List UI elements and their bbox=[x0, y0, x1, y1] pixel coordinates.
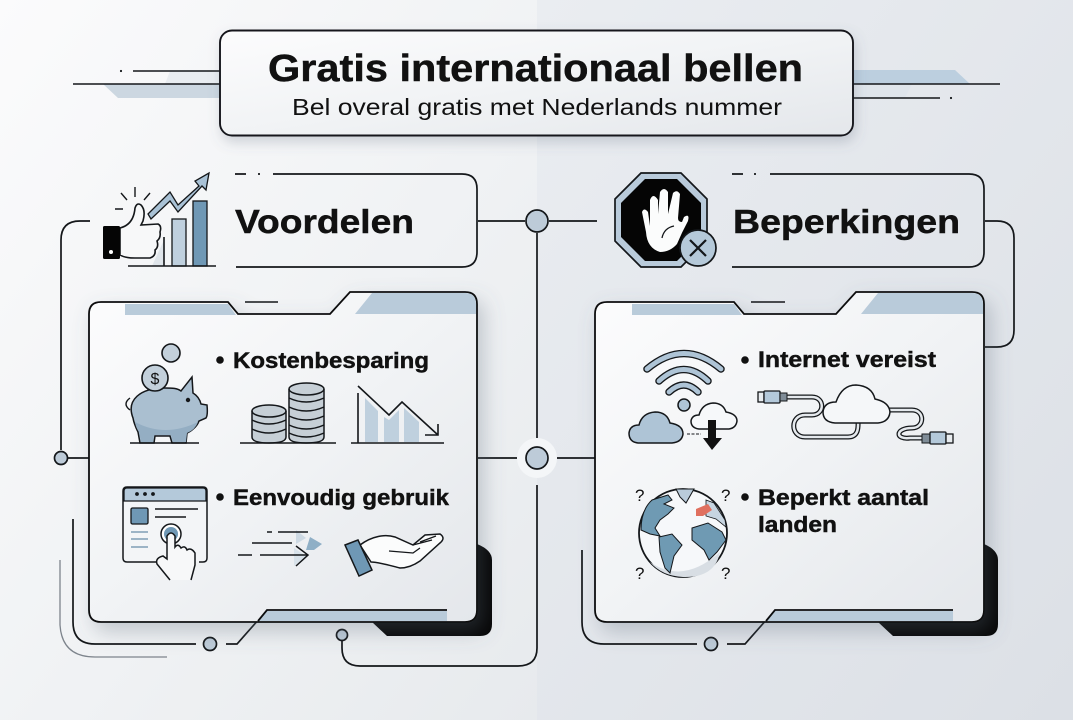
icon: speed arrows bbox=[238, 530, 322, 566]
bullet: Internet vereist: Internet vereist bbox=[758, 347, 937, 372]
icon: piggy bank: $ bbox=[150, 371, 160, 388]
heading: Beperkingen: Beperkingen bbox=[733, 203, 960, 240]
circuit connectors bbox=[60, 221, 1014, 666]
header decoration right bbox=[853, 70, 1000, 99]
icon: globe with question marks: ? bbox=[635, 564, 644, 583]
title: Gratis internationaal bellen bbox=[268, 48, 803, 90]
subtitle: Bel overal gratis met Nederlands nummer bbox=[292, 94, 782, 120]
icon: stop sign with hand bbox=[615, 173, 716, 267]
header decoration left bbox=[73, 70, 220, 98]
icon: globe with question marks: ? bbox=[721, 486, 730, 505]
icon: browser with tapping hand bbox=[123, 487, 207, 580]
title box bbox=[220, 30, 853, 136]
panel: Voordelen bbox=[89, 292, 492, 636]
icon: open hand bbox=[345, 534, 443, 576]
heading: Voordelen: Voordelen bbox=[235, 203, 414, 240]
bullet: Kostenbesparing: Kostenbesparing bbox=[233, 348, 429, 373]
icon: globe with question marks bbox=[635, 486, 730, 583]
bullet: Beperkt aantal landen: Beperkt aantal bbox=[758, 485, 929, 510]
heading box: Beperkingen bbox=[732, 174, 984, 267]
icon: thumbs up with rising chart bbox=[103, 173, 216, 266]
icon: piggy bank bbox=[126, 344, 207, 443]
bullet: Beperkt aantal landen bbox=[741, 485, 929, 537]
heading box: Voordelen bbox=[235, 174, 477, 267]
icon: wifi and clouds bbox=[629, 354, 737, 450]
connector nodes bbox=[54, 210, 718, 650]
icon: falling cost chart bbox=[351, 386, 444, 443]
icon: coin stacks bbox=[240, 383, 336, 443]
icon: cable with cloud bbox=[758, 385, 953, 444]
bullet: Eenvoudig gebruik: Eenvoudig gebruik bbox=[233, 485, 450, 510]
icon: globe with question marks: ? bbox=[721, 564, 730, 583]
bullet: Beperkt aantal landen: landen bbox=[758, 512, 837, 537]
icon: globe with question marks: ? bbox=[635, 486, 644, 505]
panel: Beperkingen bbox=[595, 292, 998, 636]
